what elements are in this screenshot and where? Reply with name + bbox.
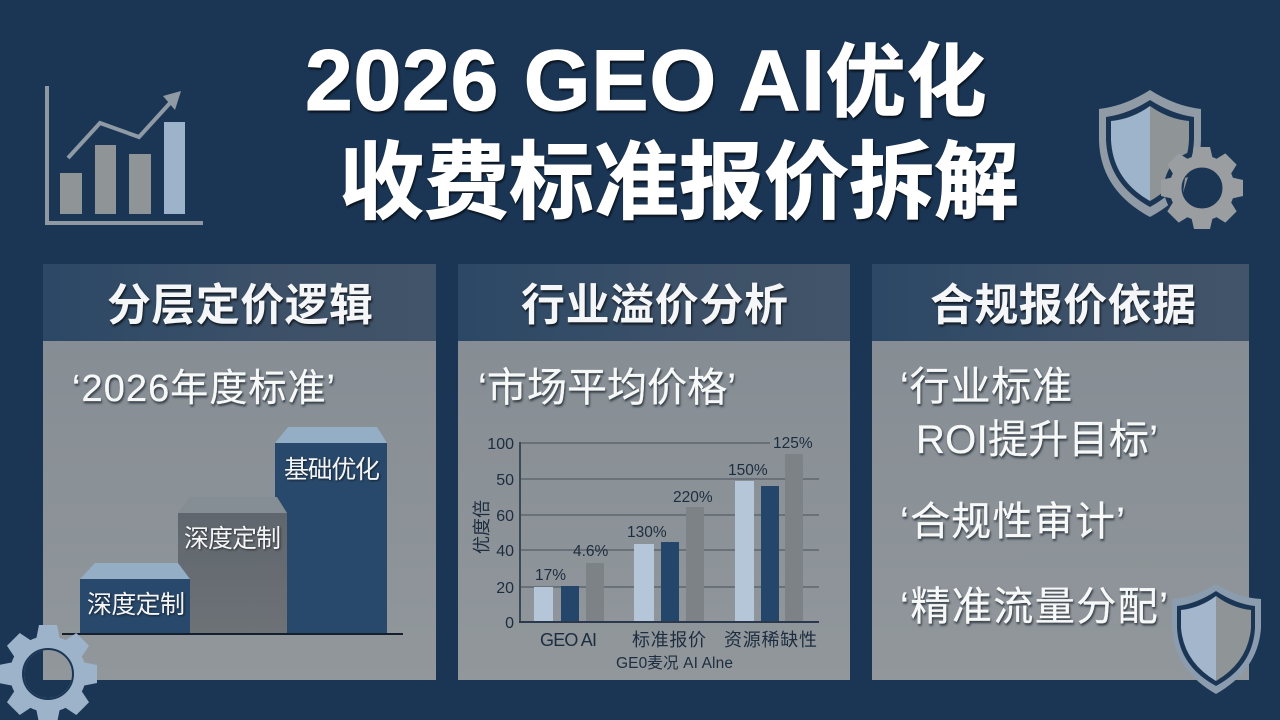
bar chart: 100 <box>487 436 514 453</box>
text: industry standard and ROI target: ROI提升目标’ <box>916 418 1158 462</box>
bar chart: 0 <box>505 615 514 632</box>
panel header: tiered pricing <box>43 264 436 341</box>
bar chart: 17% <box>535 567 566 584</box>
heading: industry premium: 行业溢价分析 <box>521 281 788 330</box>
stair chart <box>62 427 403 635</box>
heading: compliance: 合规报价依据 <box>930 281 1196 330</box>
text: traffic allocation: ‘精准流量分配’ <box>900 585 1168 629</box>
bar chart: 60 <box>496 508 514 525</box>
bar chart: 125% <box>773 435 813 452</box>
bar chart <box>472 435 819 672</box>
bar chart: 130% <box>627 524 667 541</box>
panel: compliance quotation basis <box>872 264 1249 680</box>
bar chart: 150% <box>728 462 768 479</box>
title <box>305 33 1019 231</box>
panel header: compliance <box>872 264 1249 341</box>
title: 收费标准报价拆解 <box>339 136 1019 231</box>
text: industry standard and ROI target <box>900 365 1158 462</box>
panel: industry premium analysis <box>458 264 850 680</box>
panel: tiered pricing logic <box>43 264 436 680</box>
bar chart: 资源稀缺性 <box>724 630 817 650</box>
bar chart: 20 <box>496 580 514 597</box>
panel header: industry premium <box>458 264 850 341</box>
icon: shield with gear <box>1099 90 1243 229</box>
text: market average price: ‘市场平均价格’ <box>478 366 736 410</box>
text: industry standard and ROI target: ‘行业标准 <box>900 365 1072 409</box>
bar chart: 4.6% <box>573 543 609 560</box>
text: compliance audit: ‘合规性审计’ <box>900 500 1125 544</box>
bar chart: 优度倍 <box>472 500 492 554</box>
bar chart: GEO AI <box>540 630 597 650</box>
bar chart: 220% <box>673 489 713 506</box>
heading: tiered pricing: 分层定价逻辑 <box>107 281 373 330</box>
stair chart: 基础优化 <box>284 456 380 484</box>
text: 2026 standard: ‘2026年度标准’ <box>72 368 335 410</box>
icon: corner gear <box>0 625 97 720</box>
bar chart: 50 <box>496 472 514 489</box>
stair chart: 深度定制 <box>87 591 185 619</box>
bar chart: GE0麦况 AI Alne <box>616 654 733 672</box>
title: 2026 GEO AI优化 <box>305 33 987 129</box>
stair chart: 深度定制 <box>184 525 281 553</box>
icon: rising bar chart <box>45 86 203 225</box>
bar chart: 40 <box>496 543 514 560</box>
bar chart: 标准报价 <box>632 630 706 650</box>
icon: small shield <box>1172 584 1261 694</box>
